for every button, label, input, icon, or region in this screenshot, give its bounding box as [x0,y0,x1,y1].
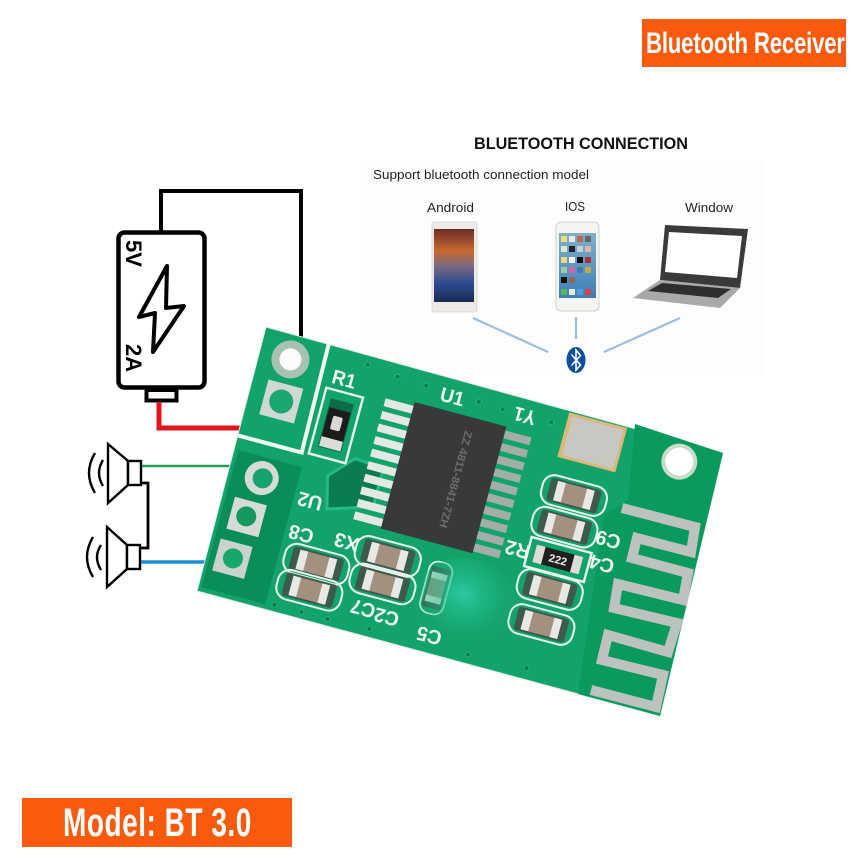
label: 5V: 5V [121,240,146,267]
icon: android phone [432,222,477,312]
wiring: battery positive black wire [161,191,301,340]
icon: bottom speaker [87,527,140,587]
panel: green PCB board [196,327,723,716]
heading: bluetooth connection: BLUETOOTH CONNECTION [474,134,688,153]
label: IOS: IOS [565,200,585,214]
glare patch [404,546,528,662]
icon: top speaker [89,444,141,503]
pad: top power hole [267,336,314,383]
connector lines [473,317,680,352]
mounting hole [657,440,701,484]
resistor R1 [309,388,363,463]
banner: Bluetooth Receiver: Bluetooth Receiver [646,26,845,60]
via dots [271,354,595,675]
wiring: green speaker wire [141,465,232,467]
silkscreen labels: R1 [330,366,358,394]
crystal Y1 [557,412,627,472]
banner: model [22,798,292,847]
text: support model: Support bluetooth connection model [373,167,589,182]
label: 2A: 2A [121,344,146,372]
label: Android: Android [427,201,474,215]
silkscreen labels: U1 [438,384,467,411]
icon: laptop [633,225,748,308]
icon: battery 5V 2A [118,232,204,400]
label: Window: Window [685,201,734,215]
silkscreen labels: C8 [286,519,316,547]
silkscreen labels: U2 [295,486,325,514]
panel: bluetooth connection [367,134,763,375]
IC pins left [366,402,400,528]
resistor 222: 222 [547,552,568,569]
resistor 222 [524,537,592,582]
pad: speaker square lower [212,539,253,579]
antenna trace [591,508,695,707]
capacitors left [274,516,456,639]
pad: top square [259,379,303,424]
silkscreen labels: C7 [348,594,378,622]
silkscreen labels: X3 [332,527,362,555]
IC pins right [484,434,518,559]
icon: iphone [556,222,599,311]
banner: model: Model: BT 3.0 [63,801,251,845]
silkscreen outlines [237,327,331,453]
wiring: black speaker common wire [139,483,148,548]
chip marking: ZZ 4811-8841-7ZH [436,429,474,529]
icon: bluetooth badge [566,347,586,373]
silkscreen labels: Y1 [512,402,539,429]
banner: Bluetooth Receiver [642,19,846,67]
wiring: red wire [159,402,240,428]
silkscreen labels: R2 [503,535,533,563]
dark pad region [201,450,302,604]
silkscreen labels [270,353,649,687]
pad: speaker round [241,457,283,499]
silkscreen labels: C5 [414,621,444,649]
wiring: blue speaker wire [141,560,208,564]
trace: dark copper area by chip [319,453,384,520]
icon: lightning bolt [139,266,184,352]
silkscreen labels: C9 [593,525,623,553]
pad: speaker square middle [226,497,267,537]
silkscreen labels: C4 [586,549,617,577]
IC chip U1 [381,402,506,553]
capacitors right column [503,472,612,648]
silkscreen labels: C2 [372,602,402,630]
